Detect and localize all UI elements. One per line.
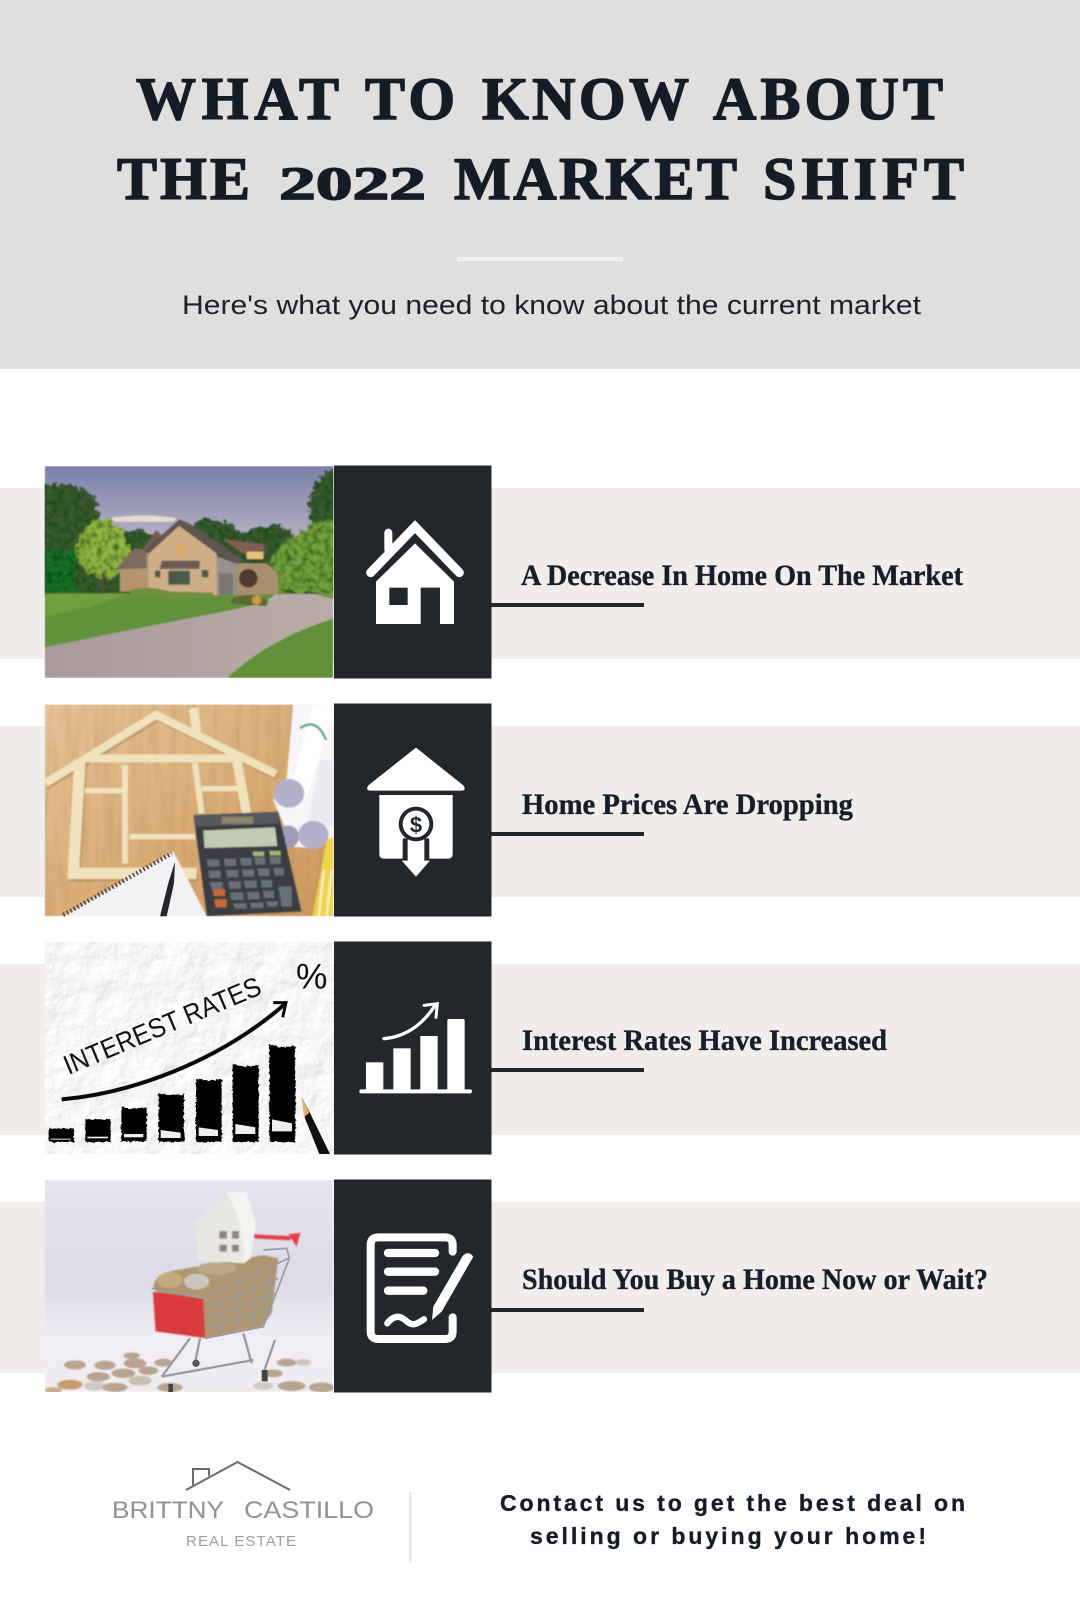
heading: Interest Rates Have Increased bbox=[522, 1024, 887, 1057]
heading: A Decrease In Home On The Market bbox=[521, 559, 963, 592]
logo name: CASTILLO bbox=[244, 1497, 374, 1524]
logo name bbox=[112, 1497, 374, 1524]
photo: house with driveway bbox=[40, 463, 340, 678]
icon: house price down bbox=[367, 748, 465, 877]
title: SHIFT bbox=[763, 146, 964, 212]
title: TO bbox=[365, 66, 455, 132]
title: WHAT bbox=[136, 66, 339, 132]
handwritten label: INTEREST RATES bbox=[59, 970, 266, 1081]
house bbox=[120, 550, 150, 592]
photo: interest rates chart on paper bbox=[45, 942, 333, 1154]
call to action: selling or buying your home! bbox=[530, 1523, 926, 1549]
connector line bbox=[491, 603, 644, 607]
call to action bbox=[500, 1490, 965, 1549]
handle bbox=[254, 1236, 291, 1238]
band bbox=[0, 1202, 1080, 1373]
title: KNOW bbox=[482, 66, 689, 132]
coins in cart bbox=[153, 1255, 278, 1338]
dark icon box bbox=[334, 466, 492, 678]
call to action: Contact us to get the best deal on bbox=[500, 1490, 965, 1516]
title: ABOUT bbox=[713, 66, 943, 132]
photo: shopping cart with house and coins bbox=[45, 1180, 334, 1393]
band bbox=[0, 726, 1080, 897]
row 2 bbox=[0, 704, 1080, 916]
connector line bbox=[491, 1308, 644, 1312]
title: 2022 bbox=[279, 158, 426, 210]
icon: house bbox=[371, 527, 459, 624]
title bbox=[117, 66, 964, 212]
dark icon box bbox=[334, 704, 492, 916]
row 1 bbox=[0, 463, 1080, 678]
connector line bbox=[491, 1068, 644, 1072]
logo tagline: REAL ESTATE bbox=[186, 1533, 296, 1550]
connector line bbox=[491, 832, 644, 836]
header panel bbox=[0, 0, 1080, 369]
icon: house price down: $ bbox=[410, 812, 422, 837]
title: MARKET bbox=[454, 146, 737, 212]
photo: wooden house frame and calculator bbox=[45, 704, 333, 916]
footer logo bbox=[112, 1462, 374, 1550]
row 4 bbox=[0, 1180, 1080, 1393]
row 3 bbox=[0, 942, 1080, 1154]
logo: roof mark bbox=[186, 1462, 290, 1490]
subtitle: Here's what you need to know about the current market bbox=[182, 290, 922, 320]
band bbox=[0, 488, 1080, 659]
house model bbox=[196, 1193, 244, 1264]
band bbox=[0, 964, 1080, 1135]
dark icon box bbox=[334, 1180, 492, 1392]
header divider bbox=[457, 257, 623, 261]
dark icon box bbox=[334, 942, 492, 1154]
logo name: BRITTNY bbox=[112, 1497, 224, 1524]
red panel bbox=[153, 1292, 205, 1338]
footer divider bbox=[409, 1492, 412, 1563]
percent sign: % bbox=[296, 957, 327, 996]
title: THE bbox=[117, 146, 250, 212]
heading: Should You Buy a Home Now or Wait? bbox=[522, 1263, 988, 1296]
heading: Home Prices Are Dropping bbox=[522, 788, 853, 821]
icon: document with pen bbox=[371, 1237, 473, 1339]
icon: rising bar chart bbox=[359, 1004, 472, 1093]
